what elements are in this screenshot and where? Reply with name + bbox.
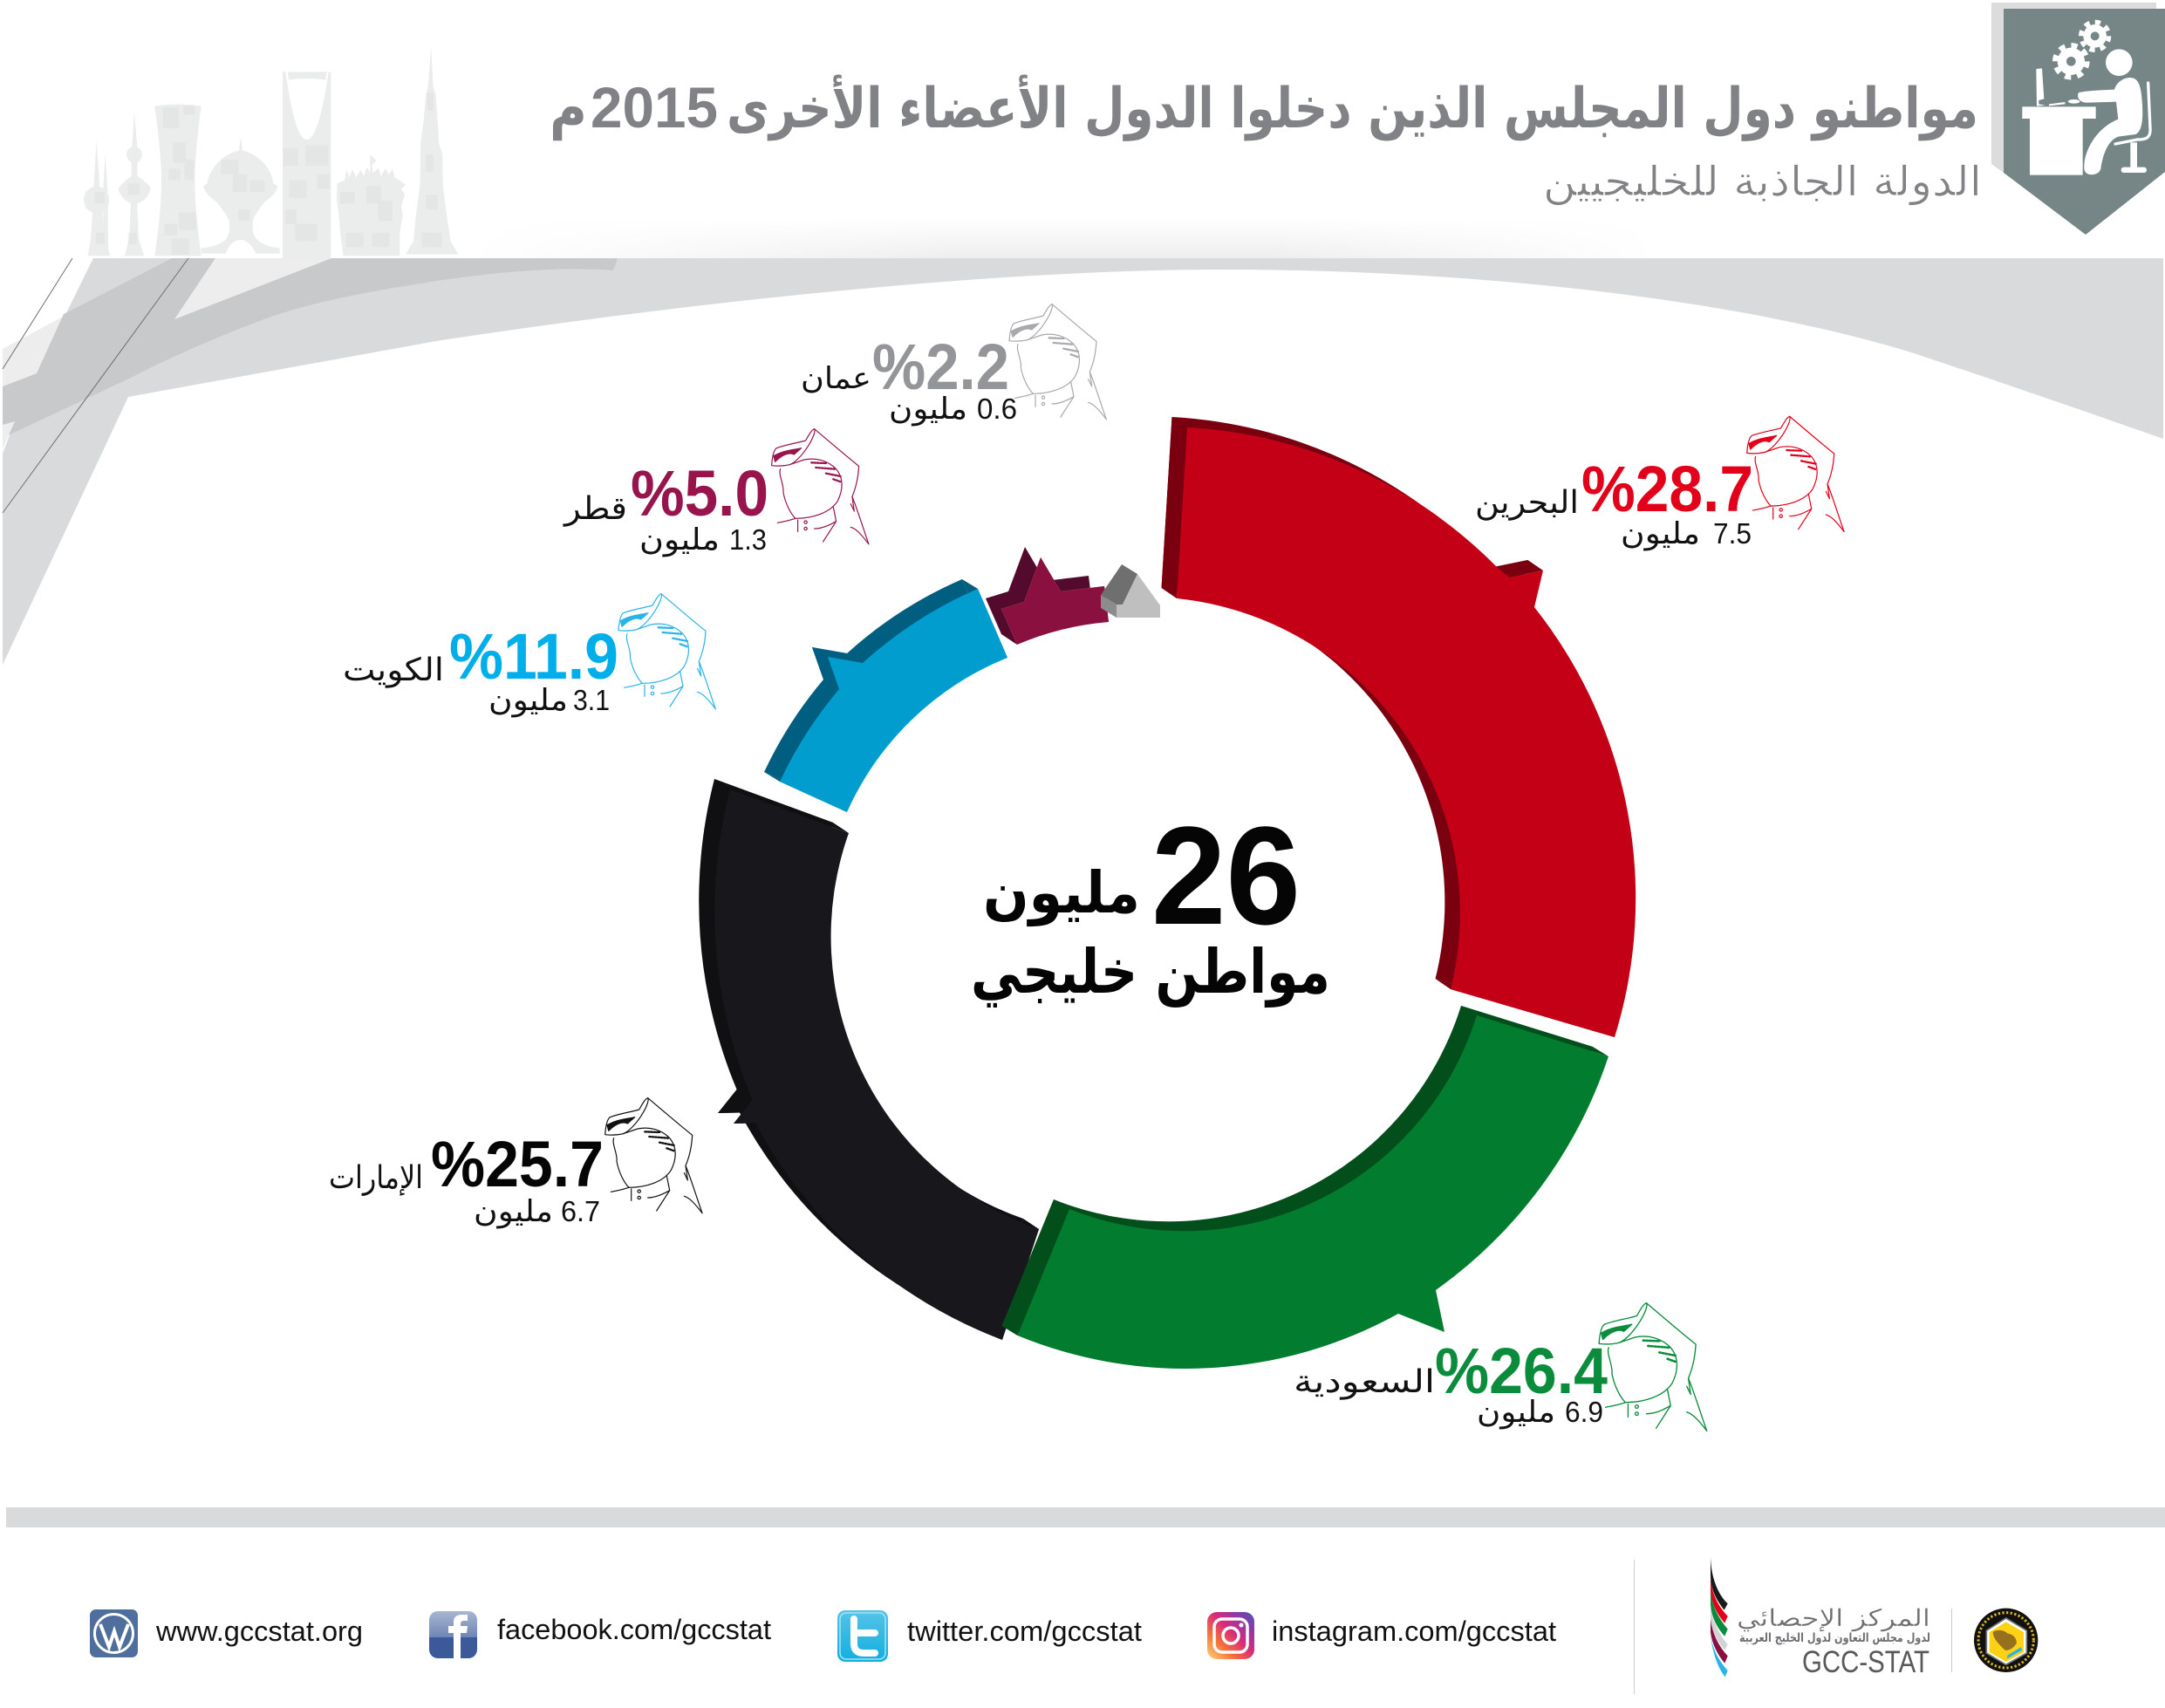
label: Qatar: 1.3	[729, 523, 767, 556]
logo: GCC-STAT ribbon	[1711, 1557, 1728, 1677]
website link	[90, 1609, 363, 1657]
label: UAE: الإمارات	[329, 1160, 423, 1196]
subtitle: الدولة الجاذبة للخليجيين	[1543, 158, 1982, 206]
centre total: مواطن خليجي	[971, 936, 1330, 1008]
label: Saudi Arabia: 6.9	[1565, 1396, 1603, 1428]
logo: GCC-STAT wordmark: GCC-STAT	[1802, 1645, 1929, 1679]
label: Kuwait	[343, 594, 715, 718]
title: 2015	[591, 75, 718, 140]
centre total: مليون	[983, 859, 1140, 927]
instagram link	[1207, 1612, 1556, 1659]
label: Bahrain: 7.5	[1713, 517, 1752, 550]
centre total	[971, 797, 1330, 1008]
logo: GCC-STAT wordmark: المركز الإحصائي	[1737, 1605, 1930, 1632]
label: Qatar: مليون	[639, 523, 720, 557]
header gradient shading	[471, 218, 1657, 258]
label: UAE	[329, 1098, 702, 1229]
logo: GCC-STAT wordmark	[1737, 1605, 1930, 1679]
label: UAE: مليون	[474, 1194, 553, 1229]
head icon: Bahrain	[1747, 416, 1844, 531]
label: Saudi Arabia: %26.4	[1435, 1335, 1608, 1407]
ring segment: Kuwait blue	[764, 579, 1007, 812]
label: Qatar: قطر	[563, 491, 627, 527]
head icon: Qatar	[772, 429, 869, 544]
ring segment: Bahrain red	[1162, 417, 1636, 1037]
title: م	[550, 77, 587, 141]
head icon: UAE	[605, 1098, 702, 1213]
background swoosh band	[3, 258, 2163, 665]
twitter link	[837, 1610, 1142, 1662]
logo: GCC seal	[1974, 1609, 2038, 1672]
label: Qatar: %5.0	[631, 457, 768, 529]
label: Oman: مليون	[889, 392, 967, 427]
head icon: Kuwait	[618, 594, 715, 709]
label: Oman	[801, 304, 1106, 427]
icon: facebook	[429, 1611, 477, 1658]
ring segment: Saudi green	[1001, 1006, 1608, 1369]
label: Qatar	[563, 429, 869, 557]
icon: twitter	[837, 1610, 888, 1662]
label: Bahrain: البحرين	[1475, 485, 1579, 521]
label: Kuwait: مليون	[488, 683, 568, 718]
label: Kuwait: %11.9	[449, 620, 618, 693]
label: Saudi Arabia	[1294, 1303, 1707, 1431]
label: Bahrain: مليون	[1621, 516, 1700, 551]
label: Saudi Arabia: مليون	[1477, 1395, 1555, 1430]
head icon: Saudi Arabia	[1599, 1303, 1707, 1431]
icon: wordpress	[90, 1609, 138, 1657]
icon: instagram	[1207, 1612, 1254, 1659]
skyline of Gulf landmarks	[84, 46, 459, 259]
head icon: Oman	[1009, 304, 1106, 420]
twitter link: twitter.com/gccstat	[907, 1616, 1142, 1647]
label: UAE: %25.7	[431, 1128, 604, 1200]
facebook link	[429, 1611, 771, 1658]
label: Oman: عمان	[801, 361, 871, 396]
logo: GCC-STAT wordmark: لدول مجلس التعاون لدول الخليج العربية	[1739, 1631, 1930, 1645]
label: Saudi Arabia: السعودية	[1294, 1364, 1435, 1400]
label: Kuwait: 3.1	[573, 684, 610, 716]
label: Bahrain: %28.7	[1581, 453, 1753, 525]
label: Oman: 0.6	[977, 393, 1017, 425]
ring segment: Oman grey	[1101, 564, 1160, 618]
label: Bahrain	[1475, 416, 1844, 551]
ring segment: Qatar maroon	[986, 547, 1109, 645]
instagram link: instagram.com/gccstat	[1272, 1616, 1556, 1647]
centre total: 26	[1151, 797, 1301, 953]
label: Kuwait: الكويت	[343, 652, 444, 688]
header shield icon: worker at desk with gears	[1991, 3, 2165, 235]
label: Oman: %2.2	[872, 331, 1009, 403]
footer band	[6, 1507, 2165, 1527]
website link: www.gccstat.org	[155, 1616, 363, 1647]
facebook link: facebook.com/gccstat	[497, 1614, 771, 1645]
label: UAE: 6.7	[561, 1195, 600, 1227]
ring segment: UAE black	[699, 779, 1039, 1340]
